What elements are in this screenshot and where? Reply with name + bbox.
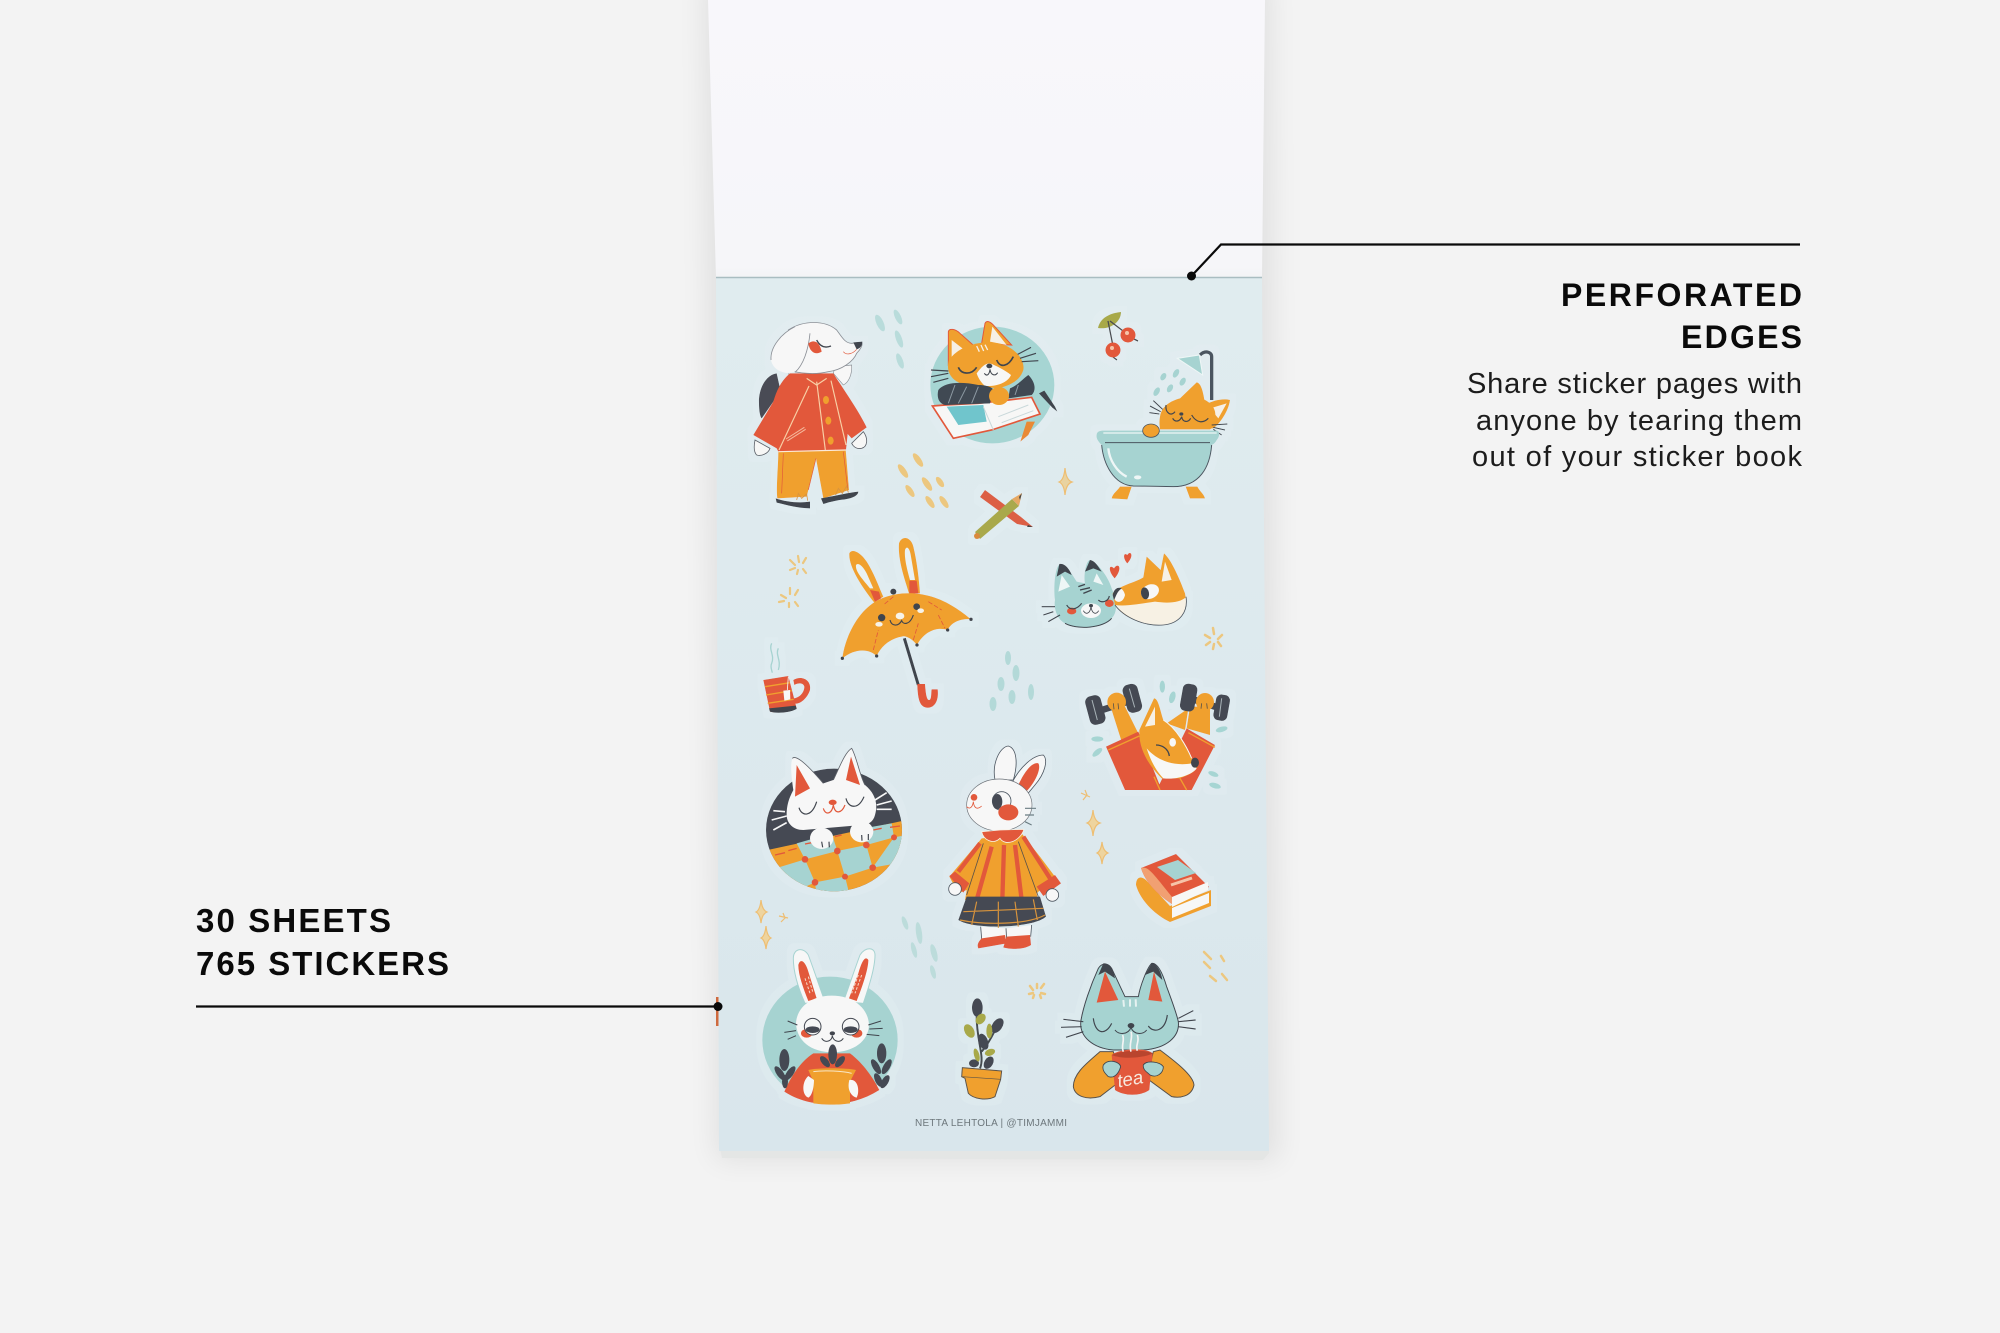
ears: [994, 746, 1046, 795]
muzzle: [977, 363, 1011, 386]
callout: perforated edges: [1187, 244, 1802, 473]
canopy: [842, 593, 971, 658]
raindrops: [990, 651, 1034, 711]
hands: [949, 883, 961, 895]
paws: [803, 1076, 858, 1098]
collar: [982, 829, 1024, 842]
handle: [793, 678, 810, 704]
head: [1139, 698, 1198, 778]
teal circle: [930, 327, 1054, 443]
sticker: grey cat with tea: [1061, 963, 1196, 1098]
leader dot: [714, 1002, 722, 1011]
pants: [777, 449, 849, 498]
sticker: dog with backpack: [753, 322, 867, 508]
rain marks lower: [900, 916, 939, 979]
ears: [1180, 382, 1230, 428]
sticker: white cat with blanket: [760, 748, 907, 897]
yellow sparkle and dashes: [1029, 952, 1227, 998]
feet: [1112, 487, 1205, 499]
paw: [1143, 424, 1159, 437]
ear: [771, 326, 810, 373]
shoes: [978, 935, 1031, 949]
lower orange book: [1136, 878, 1211, 922]
ears: [948, 322, 1012, 365]
shower: [1200, 352, 1212, 400]
description: anyone by tearing them: [1476, 405, 1802, 437]
cuffs: [949, 872, 1061, 896]
sticker: red mug: [763, 643, 810, 713]
sleeves: [938, 375, 1035, 405]
side leaves: [772, 1043, 894, 1090]
page edge tab: [716, 997, 718, 1026]
small yellow sparkles: [779, 556, 1222, 649]
steam: [1122, 1032, 1138, 1052]
hand: [989, 387, 1009, 405]
rain marks near dog: [873, 308, 906, 370]
head with ears: [1081, 963, 1178, 1050]
mug body: [763, 676, 797, 713]
head: [948, 342, 1024, 388]
pot: [808, 1068, 856, 1105]
backpack: [759, 373, 840, 419]
tea tag: [787, 677, 788, 690]
sticker: potted plant: [962, 998, 1006, 1099]
leader line: [1192, 244, 1800, 276]
cat face: [799, 797, 864, 814]
yellow dashes: [896, 452, 950, 509]
pen and pencil: [1039, 391, 1057, 412]
leader dot: [1187, 272, 1196, 280]
arms: [1112, 707, 1210, 742]
infographic canvas: [196, 0, 1802, 1162]
sticker: fox lifting dumbbells: [1084, 681, 1231, 790]
sweater: [1073, 1050, 1194, 1098]
sticker: cat reading a book: [930, 322, 1057, 443]
jacket: [753, 373, 867, 452]
tea word: tea: [1115, 1066, 1145, 1091]
sticker: cat in bathtub: [1097, 352, 1230, 499]
heading second line: EDGES: [1681, 319, 1802, 355]
chest fluff: [833, 365, 852, 385]
lifted blank page: [708, 0, 1265, 278]
sparkle: [1059, 468, 1072, 495]
artist credit: NETTA LEHTOLA | @TIMJAMMI: [915, 1118, 1067, 1129]
sticker: red and orange books: [1136, 854, 1211, 922]
heading: 30 SHEETS: [196, 902, 391, 939]
shower drops: [1152, 368, 1187, 397]
page stack edge: [720, 1148, 1269, 1160]
dumbbells: [1097, 698, 1220, 712]
sticker: bunny with plant pot: [762, 949, 898, 1105]
tub: [1097, 431, 1219, 487]
sweat drops: [1091, 681, 1228, 790]
sweater: [784, 1053, 879, 1104]
paws: [810, 828, 833, 849]
checked blanket: [770, 821, 902, 892]
paws: [754, 432, 867, 455]
sticker book: [704, 0, 1278, 1160]
description: out of your sticker book: [1472, 441, 1802, 473]
skirt: [958, 897, 1046, 927]
hearts: [1110, 553, 1131, 578]
sticker sheet: [716, 278, 1269, 1151]
callout: sheets and stickers: [196, 902, 722, 1026]
grey cat: [1054, 560, 1116, 627]
leader line: [196, 1005, 718, 1008]
sticker: cherries: [1098, 312, 1138, 360]
sticker: kissing cats: [1042, 553, 1187, 627]
gold sparkles: [756, 790, 1108, 949]
rib tips: [841, 618, 973, 660]
face: [1093, 1015, 1167, 1032]
head: [1159, 397, 1215, 429]
head: [967, 779, 1032, 831]
perforation line: [716, 276, 1262, 278]
sticker: bunny umbrella: [841, 538, 973, 708]
bunny ears: [849, 538, 920, 603]
jacket: [1106, 728, 1215, 790]
head: [796, 996, 869, 1052]
description: Share sticker pages with: [1467, 368, 1802, 400]
dark round background: [766, 769, 902, 891]
teal oval: [762, 977, 898, 1103]
cat head: [787, 748, 876, 830]
legs: [981, 925, 1032, 940]
hands: [1107, 693, 1126, 711]
mug: [1112, 1049, 1153, 1095]
umbrella face: [878, 614, 885, 621]
sticker: bunny in dress: [949, 746, 1061, 949]
sticker: crossed pencils: [974, 490, 1033, 539]
steam: [771, 643, 779, 673]
paws: [1103, 1061, 1163, 1077]
heading second line: 765 STICKERS: [196, 945, 449, 982]
fox cat: [1113, 553, 1186, 625]
heading: PERFORATED: [1561, 277, 1802, 313]
ears: [793, 949, 875, 1003]
head: [788, 322, 862, 373]
handle: [904, 638, 918, 685]
shoes: [776, 492, 858, 508]
description: [1467, 368, 1802, 473]
dress: [949, 833, 1055, 902]
upper red book: [1141, 854, 1209, 904]
book shadow: [704, 0, 1278, 1160]
book: [932, 397, 1040, 438]
